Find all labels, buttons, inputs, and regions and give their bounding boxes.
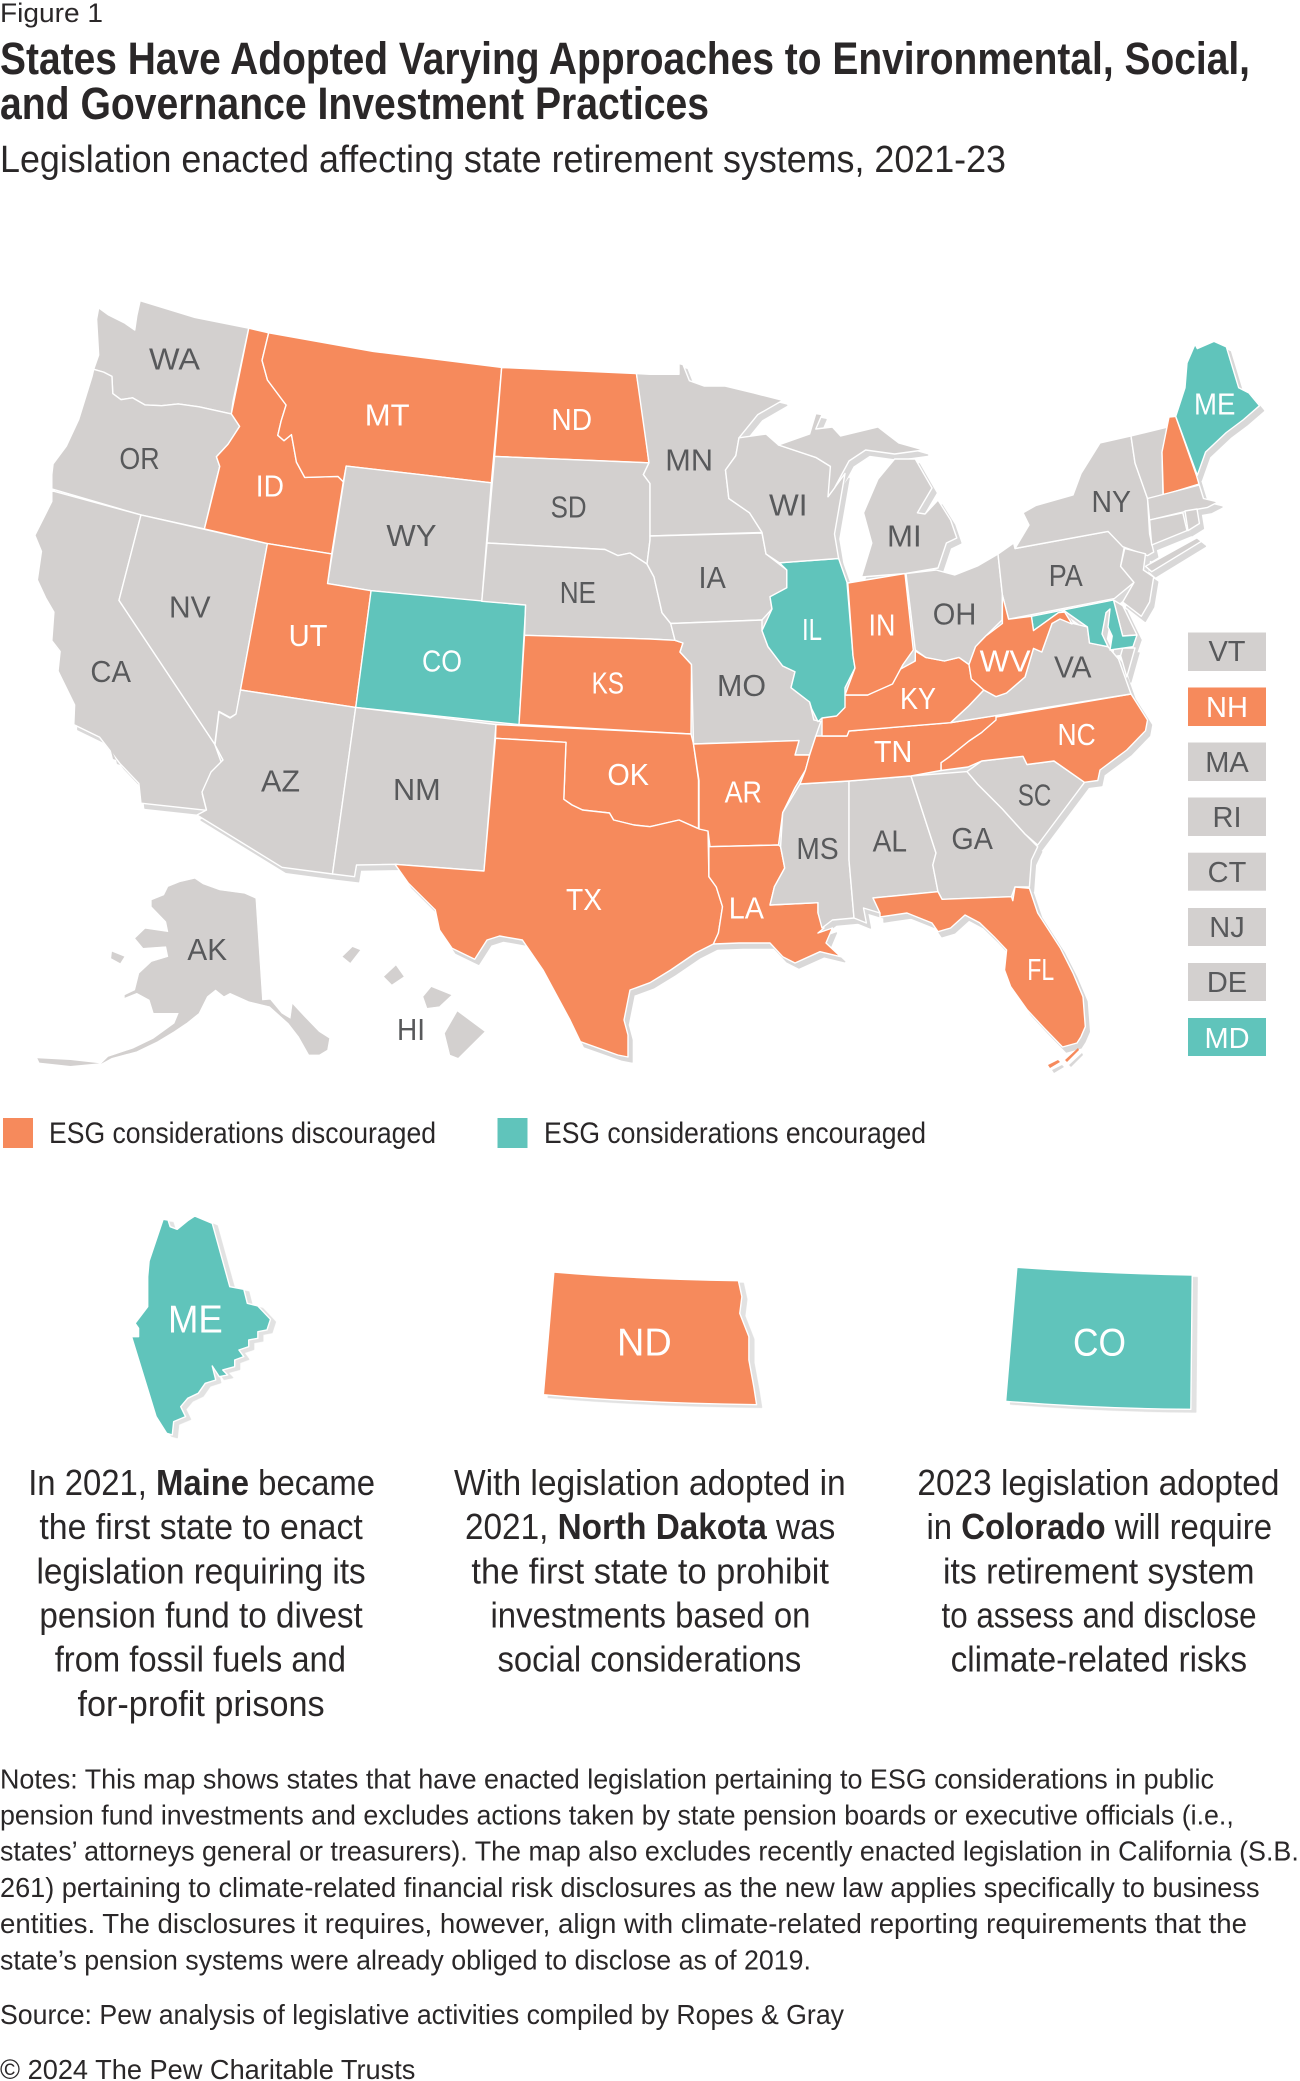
callout icon: Maine: ME [168,1299,223,1342]
callout text: Maine: In 2021, Maine became [28,1462,375,1503]
small state boxes key: NH [1206,692,1248,724]
map labels: gray states: NV [169,590,211,624]
small state boxes key: CT [1208,857,1247,889]
state: MA [1148,485,1218,520]
callout icon: Colorado [1006,1267,1192,1409]
map labels: gray states: GA [951,821,993,856]
small state boxes key: NJ [1209,912,1245,944]
map labels: gray states: IA [698,560,726,595]
long island [1146,538,1201,572]
callout text: Colorado: to assess and disclose [942,1594,1257,1635]
map labels: gray states: PA [1049,558,1083,593]
state: NC [941,694,1148,782]
state: IL [762,558,855,722]
map labels: colored states: LA [729,891,764,926]
legend swatch: encouraged [498,1118,528,1148]
map labels: colored states [256,387,1235,987]
map labels: colored states: KS [592,666,624,700]
map labels: colored states: NC [1058,717,1096,752]
state: HI [342,947,485,1058]
state: ID [204,328,343,554]
map labels: gray states: MN [665,443,713,478]
map labels: gray states: AL [873,824,907,859]
state: RI [1185,509,1199,531]
state: UT [240,544,371,707]
map labels: colored states: ID [256,468,284,503]
map labels: gray states: SD [551,490,587,524]
state: LA [709,845,841,963]
state: MT [262,333,502,483]
map labels: gray states: NY [1092,484,1131,519]
state: WY [328,466,491,601]
state: SD [487,456,650,564]
state: OH [906,554,1002,664]
state: NY [1015,436,1154,556]
map labels: colored states: UT [289,618,328,653]
map labels: colored states: MT [365,398,410,433]
map labels: gray states: MO [717,668,766,703]
map labels: colored states: OK [607,757,649,792]
state: IN [845,574,913,695]
state: NM [332,707,496,877]
notes: entities. The disclosures it requires, however, align with climate-related reporting requirements that the [0,1908,1247,1939]
state: MI upper peninsula [778,414,924,497]
notes: pension fund investments and excludes actions taken by state pension boards or executive officials (i.e., [0,1799,1234,1830]
callout text: Maine: from fossil fuels and [55,1639,346,1680]
state: GA [911,772,1038,899]
callout text: North Dakota: 2021, North Dakota was [465,1506,835,1547]
state: NJ [1121,548,1154,616]
legend swatch: discouraged [3,1118,33,1148]
small state boxes key [1188,632,1266,1056]
map labels: colored states: FL [1027,952,1054,987]
map of contiguous US states [35,301,1259,1068]
map labels: gray states: NM [393,772,441,807]
map labels: colored states: ND [551,402,592,437]
state: ME [1176,341,1260,475]
state: CA [35,491,223,810]
callout text: Maine: pension fund to divest [39,1594,363,1635]
state: TX [395,738,722,1057]
title [0,33,1250,129]
map labels: gray states [90,341,1131,1047]
map labels: gray states: CA [90,654,131,689]
state: MO [671,620,821,755]
map labels: gray states: OR [119,441,160,476]
map labels: colored states: WV [980,644,1031,679]
callout text: Maine: for-profit prisons [78,1683,325,1724]
small state boxes key: VT [1208,636,1246,668]
state: WA [94,301,249,414]
callout icon: North Dakota [543,1272,757,1405]
callout text: Colorado: climate-related risks [951,1639,1247,1680]
state: KY [822,651,984,736]
map labels: colored states: KY [900,681,936,716]
state: WI [726,434,845,563]
state: FL [873,887,1085,1047]
state: SC [967,756,1084,845]
map labels: gray states: AZ [261,764,300,799]
florida keys [1048,1048,1079,1068]
title: and Governance Investment Practices [0,78,709,129]
map labels: colored states: IL [802,612,822,647]
state: OK [496,724,708,831]
map labels: gray states: HI [397,1012,425,1047]
notes [0,1763,1299,1975]
state: AK [100,878,330,1065]
state: MI lower peninsula [861,459,957,577]
state: DE [1114,600,1137,636]
state: IA [647,533,787,624]
state: WV [969,595,1072,697]
state: VA [951,618,1131,723]
callout text: North Dakota [454,1462,846,1680]
notes: 261) pertaining to climate-related financial risk disclosures as the new law applies specifically to business [0,1872,1260,1903]
california channel islands [74,692,120,760]
map labels: gray states: OH [933,597,976,632]
callout text: Colorado: in Colorado will require [926,1506,1272,1547]
map labels: colored states: IN [868,607,895,642]
state: MN [636,364,783,536]
state: PA [998,531,1134,619]
map labels: gray states: AK [187,932,227,967]
map labels: colored states: ME [1194,387,1235,422]
callout icon: North Dakota: ND [617,1322,672,1365]
map of Alaska and Hawaii [37,878,485,1066]
callout text: North Dakota: investments based on [490,1594,810,1635]
state: NH [1162,416,1199,495]
map labels: colored states: CO [422,644,462,679]
notes: state’s pension systems were already obliged to disclose as of 2019. [0,1944,811,1975]
state: ND [495,367,649,463]
state: CT [1150,513,1187,545]
callout text: Maine [28,1462,375,1724]
legend [3,1117,926,1150]
subtitle: Legislation enacted affecting state retirement systems, 2021-23 [0,139,1006,181]
callout text: North Dakota: social considerations [498,1639,801,1680]
map labels: gray states: MS [796,831,839,866]
callout text: North Dakota: With legislation adopted in [454,1462,846,1503]
state: OR [52,369,240,529]
state: MD [1031,600,1137,650]
small state boxes key: RI [1212,802,1242,834]
map labels: colored states: TN [874,734,912,769]
callout text: Colorado: 2023 legislation adopted [917,1462,1279,1503]
callout text: Maine: legislation requiring its [36,1550,366,1591]
map labels: colored states: TX [566,882,602,917]
small state boxes key: MA [1205,747,1249,779]
state: NV [119,515,267,744]
notes: states’ attorneys general or treasurers). The map also excludes recently enacted legislation in California (S.B. [0,1836,1299,1867]
callout icon: Maine [132,1216,270,1435]
callout text: Colorado [917,1462,1279,1680]
state: AL [849,776,938,923]
callout icon: Colorado: CO [1073,1322,1126,1365]
state: VA eastern shore [1121,648,1135,677]
state: AZ [197,690,356,874]
small state boxes key: MD [1204,1023,1250,1055]
map labels: gray states: NE [560,575,596,610]
map labels: gray states: WA [149,341,200,376]
notes: Notes: This map shows states that have enacted legislation pertaining to ESG considerations in public [0,1763,1214,1794]
callout text: North Dakota: the first state to prohibit [471,1550,829,1591]
callout text: Colorado: its retirement system [943,1550,1254,1591]
map labels: colored states: AR [725,775,762,810]
state: KS [519,635,692,734]
state: VT [1131,427,1168,498]
map labels: gray states: VA [1054,650,1092,685]
state: AR [694,741,810,847]
state: CO [356,591,526,725]
state: MS [770,781,854,928]
state: TN [800,716,996,784]
callout text: Maine: the first state to enact [39,1506,363,1547]
alaska islands [37,952,124,1066]
source: Source: Pew analysis of legislative activities compiled by Ropes & Gray [0,1999,844,2030]
map labels: gray states: WI [769,487,808,522]
state: NE [482,543,675,640]
map labels: gray states: SC [1018,778,1051,813]
legend text: encouraged: ESG considerations encouraged [544,1117,926,1150]
map labels: gray states: MI [887,518,922,553]
legend text: discouraged: ESG considerations discouraged [49,1117,436,1150]
map labels: gray states: WY [386,518,437,553]
small state boxes key: DE [1207,967,1247,999]
